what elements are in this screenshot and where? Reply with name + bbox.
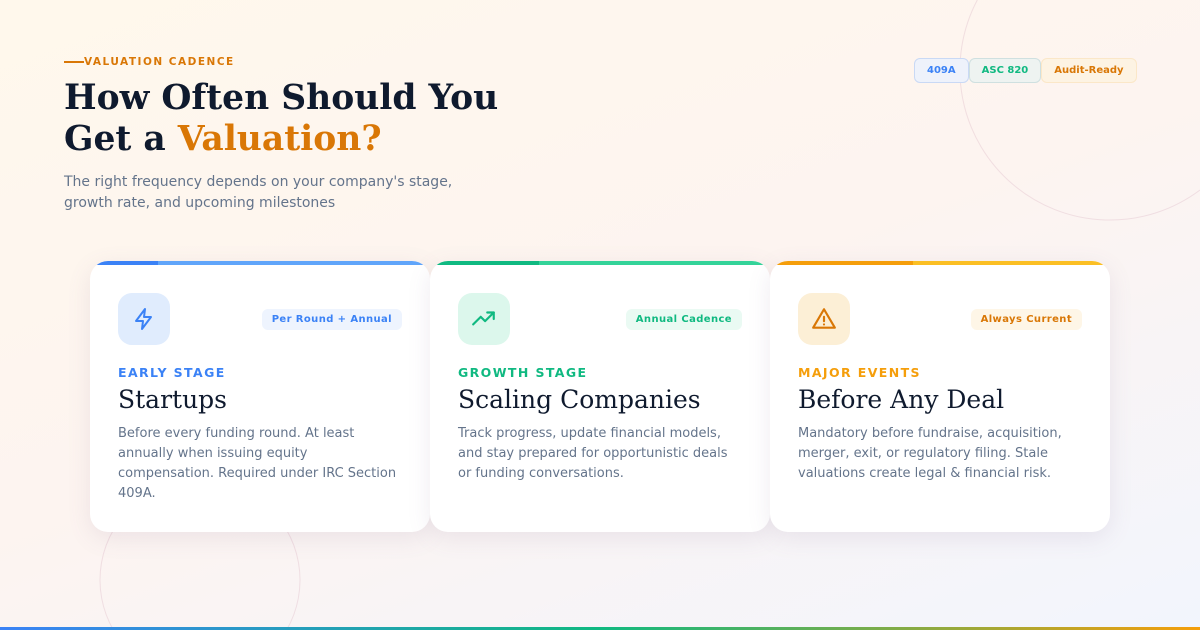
label: GROWTH STAGE: [458, 365, 587, 380]
badge: [971, 309, 1082, 330]
badge: Per Round + Annual: [272, 314, 392, 325]
description: Mandatory before fundraise, acquisition, merger, exit, or regulatory filing. Stale valuations create legal & financial risk.: [798, 426, 1062, 481]
tags: ASC 820: [982, 65, 1028, 76]
card title: Scaling Companies: [458, 385, 701, 414]
subtitle: [64, 174, 452, 210]
card title: Before Any Deal: [798, 385, 1004, 414]
icon: trend up: [458, 293, 510, 345]
badge: [262, 309, 402, 330]
icon: warning: [798, 293, 850, 345]
card: major events: [770, 261, 1110, 532]
title: [64, 78, 498, 159]
card: early stage: [90, 261, 430, 532]
label: MAJOR EVENTS: [798, 365, 921, 380]
tags: [914, 58, 1137, 83]
title: Get a Valuation?: [64, 119, 382, 159]
icon: lightning: [118, 293, 170, 345]
badge: [626, 309, 742, 330]
card title: Startups: [118, 385, 227, 414]
description: Before every funding round. At least annually when issuing equity compensation. Required under IRC Section 409A.: [118, 426, 396, 501]
subtitle: growth rate, and upcoming milestones: [64, 194, 335, 210]
title: How Often Should You: [64, 78, 498, 118]
tags: 409A: [927, 65, 956, 76]
kicker: VALUATION CADENCE: [84, 56, 235, 68]
badge: Always Current: [981, 314, 1072, 325]
card: growth stage: [430, 261, 770, 532]
tags: Audit-Ready: [1054, 65, 1124, 76]
description: Track progress, update financial models, and stay prepared for opportunistic deals or funding conversations.: [458, 426, 728, 481]
label: EARLY STAGE: [118, 365, 226, 380]
subtitle: The right frequency depends on your company's stage,: [64, 174, 452, 190]
badge: Annual Cadence: [636, 314, 732, 325]
